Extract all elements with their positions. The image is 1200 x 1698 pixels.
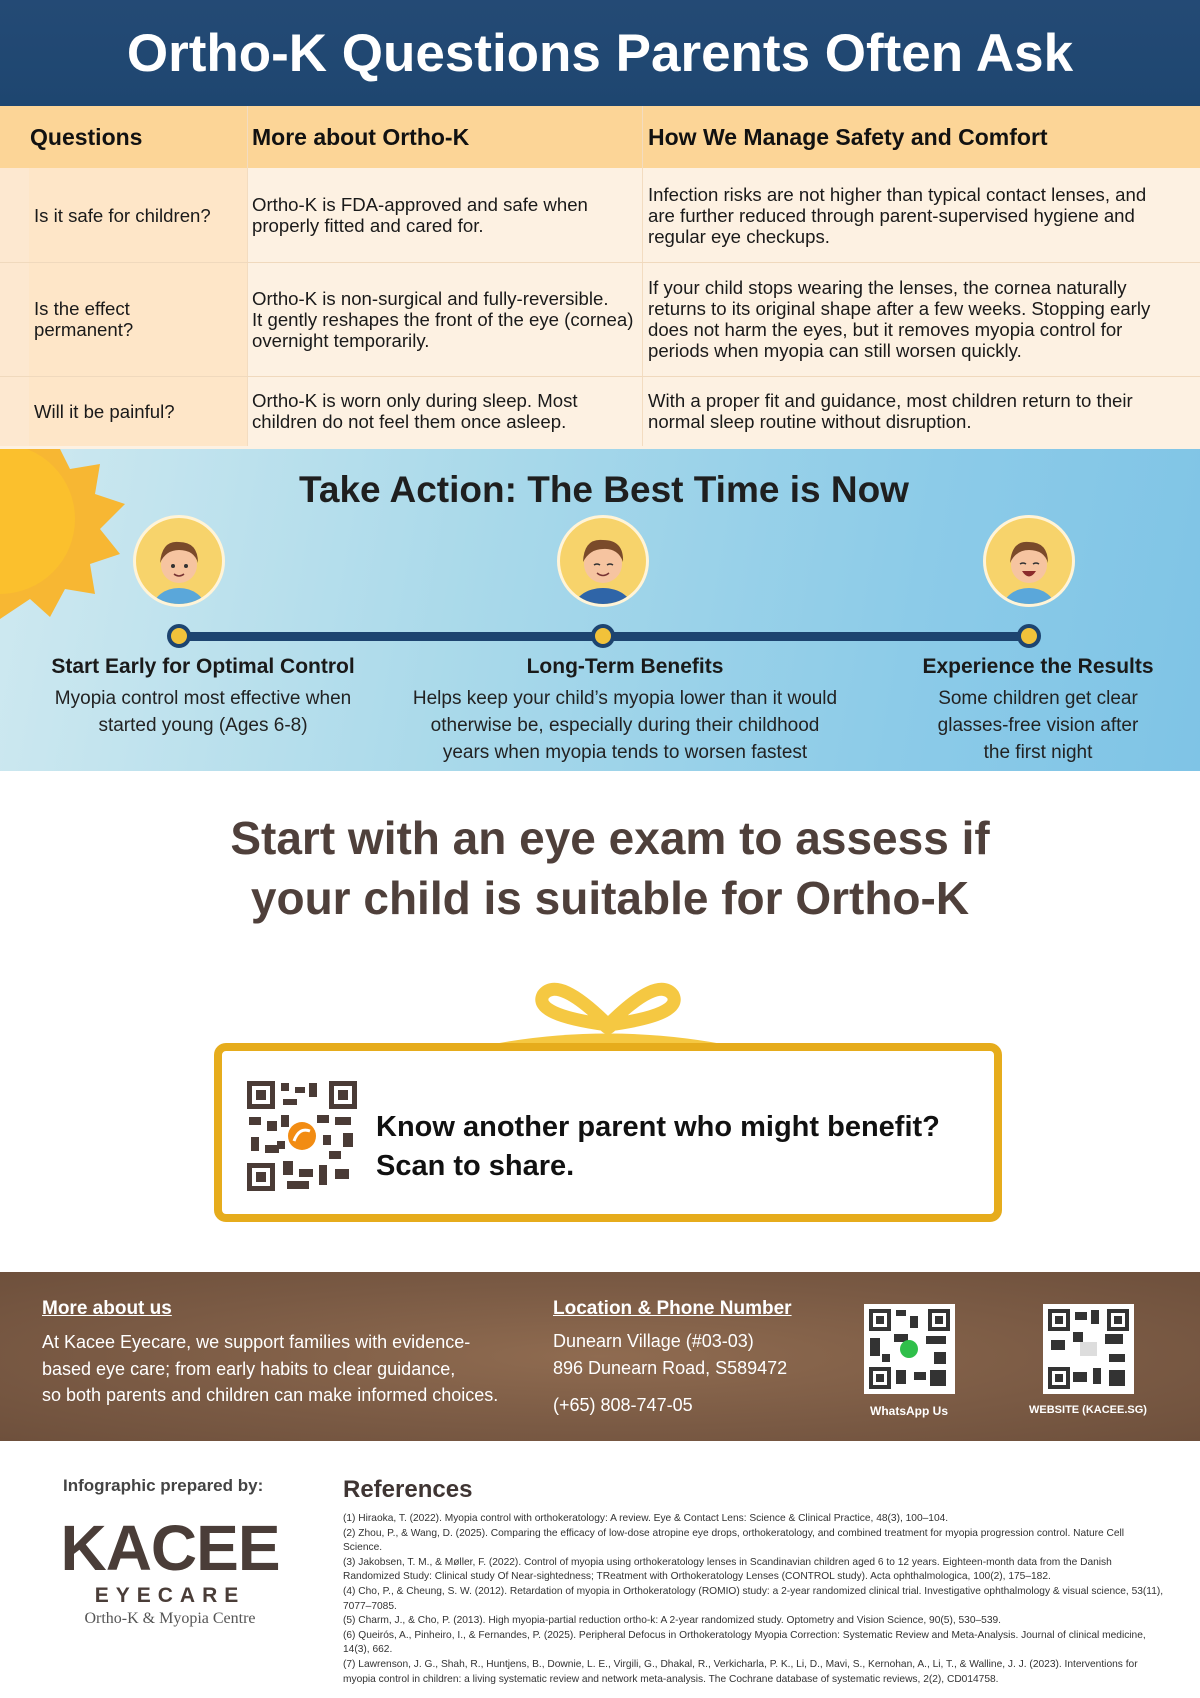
more about us: so both parents and children can make informed choices. [42, 1385, 498, 1405]
more about us: At Kacee Eyecare, we support families with evidence- [42, 1332, 470, 1352]
references: (4) Cho, P., & Cheung, S. W. (2012). Retardation of myopia in Orthokeratology (ROMIO) study: a 2-year randomized clinical trial. Investigative ophthalmology & visual science, 53(11), 7077–7085. [343, 1586, 1163, 1612]
location [553, 1298, 792, 1415]
icon: sun [0, 449, 125, 619]
references: (6) Queirós, A., Pinheiro, I., & Fernandes, P. (2025). Peripheral Defocus in Orthokeratology Myopia Correction: Systematic Review and Meta-Analysis. Journal of clinical medicine, 14(3), 662. [343, 1630, 1146, 1655]
references: (7) Lawrenson, J. G., Shah, R., Huntjens, B., Downie, L. E., Virgili, G., Dhakal, R., Verkicharla, P. K., Li, D., Mavi, S., Kernohan, A., Li, T., & Walline, J. J. (2023). Interventions for myopia control in children: a living systematic review and network meta-analysis. The Cochrane database of systematic reviews, 2(2), CD014758. [343, 1659, 1138, 1685]
share text [376, 1111, 940, 1182]
references: (3) Jakobsen, T. M., & Møller, F. (2022). Control of myopia using orthokeratology lenses in Scandinavian children aged 6 to 12 years. Eighteen-month data from the Danish Randomized Study: Clinical study Of Near-sightedness; TReatment with Orthokeratology Lenses (CONTROL study). Acta ophthalmologica, 100(2), 175–182. [343, 1557, 1112, 1582]
qr code share [247, 1081, 357, 1191]
more about us: based eye care; from early habits to clear guidance, [42, 1358, 455, 1378]
logo: kacee: EYECARE [95, 1584, 245, 1607]
table [0, 106, 1200, 449]
references [343, 1476, 1163, 1685]
step 2: Helps keep your child’s myopia lower than it would otherwise be, especially during their childhood years when myopia tends to worsen fastest [413, 688, 837, 763]
step 2 [413, 655, 837, 763]
prepared by label: Infographic prepared by: [63, 1476, 263, 1495]
references: (5) Charm, J., & Cho, P. (2013). High myopia-partial reduction ortho-k: A 2-year randomized study. Optometry and Vision Science, 90(5), 530–539. [343, 1615, 1001, 1626]
timeline line [179, 632, 1029, 641]
step 1 [51, 655, 355, 736]
step 1: Myopia control most effective when [55, 688, 351, 709]
heading: eye exam: your child is suitable for Ortho-K [251, 872, 969, 924]
step 3: Some children get clear glasses-free vision after the first night [938, 688, 1138, 763]
step 3: Experience the Results [922, 655, 1154, 678]
table: It gently reshapes the front of the eye (cornea) overnight temporarily. [252, 308, 633, 350]
avatar 3 [983, 515, 1075, 607]
title banner: Ortho-K Questions Parents Often Ask [127, 24, 1073, 82]
table header row: More about Ortho-K [252, 124, 469, 150]
logo: kacee [60, 1512, 280, 1627]
step 1: Start Early for Optimal Control [51, 655, 355, 678]
location: (+65) 808-747-05 [553, 1395, 693, 1415]
table: If your child stops wearing the lenses, the cornea naturally returns to its original shape after a few weeks. Stopping early does not harm the eyes, but it removes myopia control for periods when myopia can still worsen quickly. [648, 277, 1150, 361]
row 1: Is it safe for children? [34, 204, 211, 226]
table: Ortho-K is FDA-approved and safe when properly fitted and cared for. [252, 194, 588, 236]
icon: ribbon bow [500, 982, 716, 1043]
heading: eye exam [230, 812, 990, 924]
references: (1) Hiraoka, T. (2022). Myopia control with orthokeratology: A review. Eye & Contact Lens: Science & Clinical Practice, 48(3), 100–104. [343, 1513, 948, 1524]
logo: kacee: KACEE [60, 1512, 280, 1584]
location: Location & Phone Number [553, 1298, 792, 1319]
location: 896 Dunearn Road, S589472 [553, 1358, 787, 1378]
qr whatsapp [864, 1304, 955, 1418]
qr website: WEBSITE (KACEE.SG) [1029, 1404, 1147, 1416]
avatar 2 [557, 515, 649, 607]
table: Ortho-K is non-surgical and fully-reversible. [252, 288, 609, 308]
timeline dots [167, 624, 191, 648]
more about us: More about us [42, 1298, 172, 1319]
references: (2) Zhou, P., & Wang, D. (2025). Comparing the efficacy of low-dose atropine eye drops, orthokeratology, and combined treatment for myopia progression control. Nature Cell Science. [343, 1528, 1124, 1553]
qr website [1029, 1304, 1147, 1416]
heading: eye exam: Start with an eye exam to assess if [230, 812, 990, 864]
step 1: started young (Ages 6-8) [98, 715, 308, 736]
table: With a proper fit and guidance, most children return to their normal sleep routine without disruption. [648, 390, 1133, 432]
qr whatsapp: WhatsApp Us [870, 1404, 948, 1418]
row 2: Is the effect permanent? [34, 298, 133, 340]
table header row [0, 106, 1200, 168]
share text: Scan to share. [376, 1150, 574, 1182]
references: References [343, 1476, 472, 1503]
location: Dunearn Village (#03-03) [553, 1331, 754, 1351]
table: Infection risks are not higher than typical contact lenses, and are further reduced through parent-supervised hygiene and regular eye checkups. [648, 184, 1146, 246]
title banner [0, 0, 1200, 106]
step 3 [922, 655, 1154, 763]
row 3: Will it be painful? [34, 400, 175, 422]
heading: Take Action: The Best Time is Now [299, 469, 909, 510]
table: Ortho-K is worn only during sleep. Most children do not feel them once asleep. [252, 390, 578, 432]
panel: take action [0, 449, 1200, 771]
more about us [42, 1298, 498, 1405]
share text: Know another parent who might benefit? [376, 1111, 940, 1143]
callout: share box [214, 1043, 1002, 1222]
logo: kacee: Ortho-K & Myopia Centre [84, 1610, 256, 1627]
footer panel [0, 1272, 1200, 1441]
table header row: Questions [30, 124, 142, 150]
avatar 1 [133, 515, 225, 607]
step 2: Long-Term Benefits [527, 655, 723, 678]
table header row: How We Manage Safety and Comfort [648, 124, 1048, 150]
